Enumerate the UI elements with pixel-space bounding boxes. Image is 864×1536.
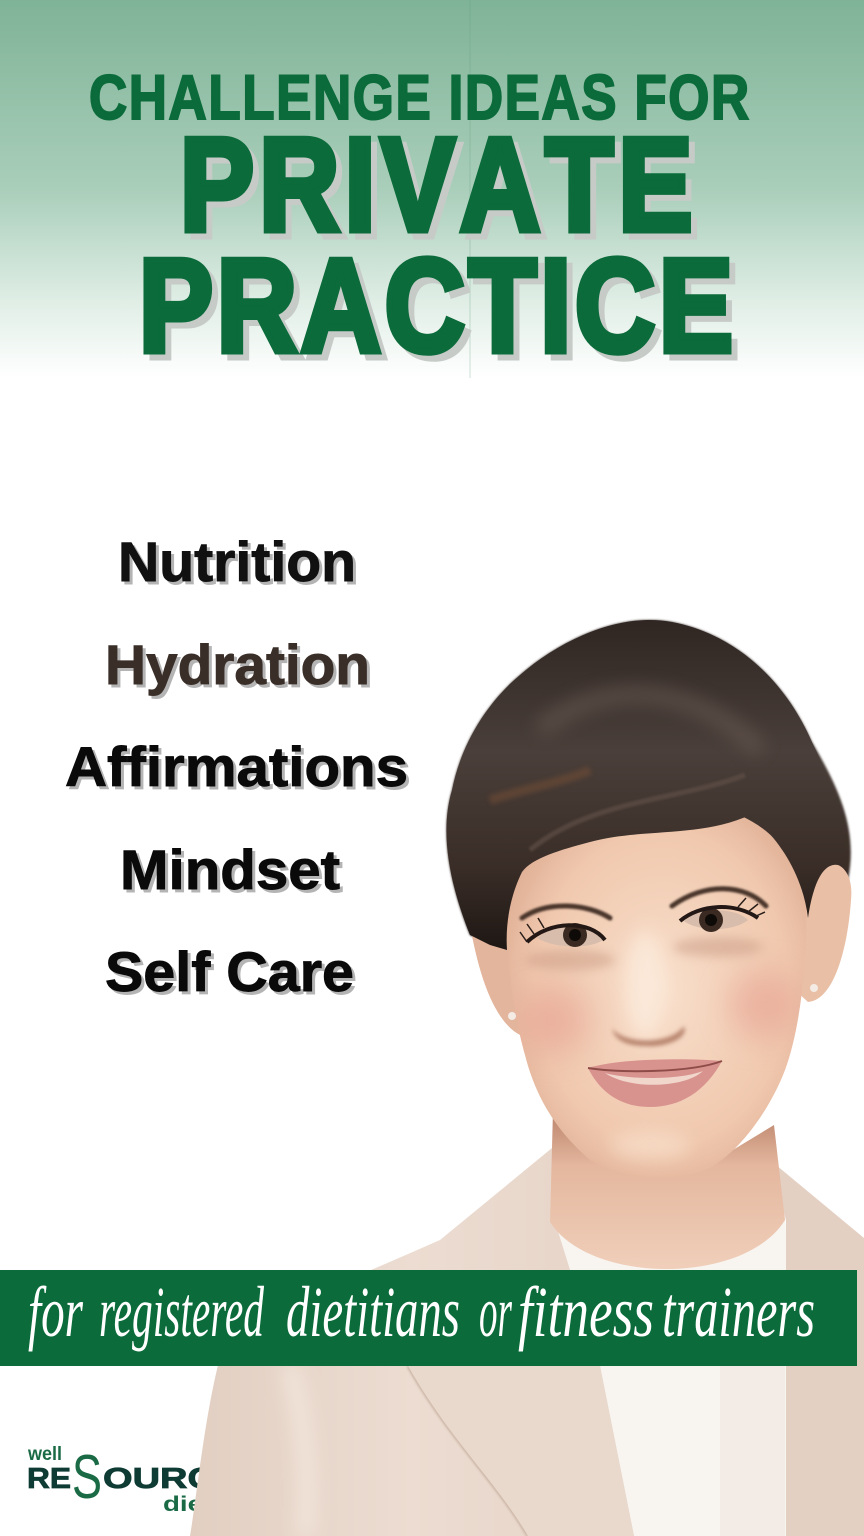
banner: or <box>479 1272 512 1352</box>
title: PRIVATE <box>180 111 692 258</box>
logo: S <box>72 1443 102 1512</box>
header gradient band <box>0 0 864 378</box>
banner: dietitians <box>286 1272 460 1352</box>
face <box>507 800 806 1177</box>
logo: OURC <box>103 1463 215 1495</box>
title <box>89 63 749 379</box>
challenge topic list: Hydration <box>105 633 370 696</box>
title: CHALLENGE IDEAS FOR <box>89 63 749 133</box>
neck <box>550 1110 785 1269</box>
eyes <box>520 898 765 947</box>
title: PRACTICE <box>139 232 733 379</box>
mouth <box>588 1059 722 1107</box>
challenge topic list: Affirmations <box>65 735 408 798</box>
ears <box>470 863 851 1035</box>
eyebrows <box>522 889 766 918</box>
logo: well <box>27 1444 62 1465</box>
portrait photo: woman <box>190 620 864 1536</box>
banner <box>0 1270 857 1366</box>
hair back <box>446 620 851 950</box>
challenge topic list: Self Care <box>105 940 354 1003</box>
banner: fitness <box>518 1272 654 1352</box>
challenge topic list: Mindset <box>120 838 340 901</box>
banner: for <box>28 1272 84 1352</box>
banner: registered <box>99 1272 265 1352</box>
logo: die <box>163 1493 203 1516</box>
hair fringe <box>446 620 846 950</box>
challenge topic list: Nutrition <box>118 530 356 593</box>
logo: RE <box>27 1463 71 1495</box>
nose <box>612 1026 685 1046</box>
facial shading <box>514 930 801 1159</box>
jacket and shirt <box>190 1148 864 1536</box>
logo <box>27 1443 215 1516</box>
challenge topic list <box>65 530 408 1003</box>
